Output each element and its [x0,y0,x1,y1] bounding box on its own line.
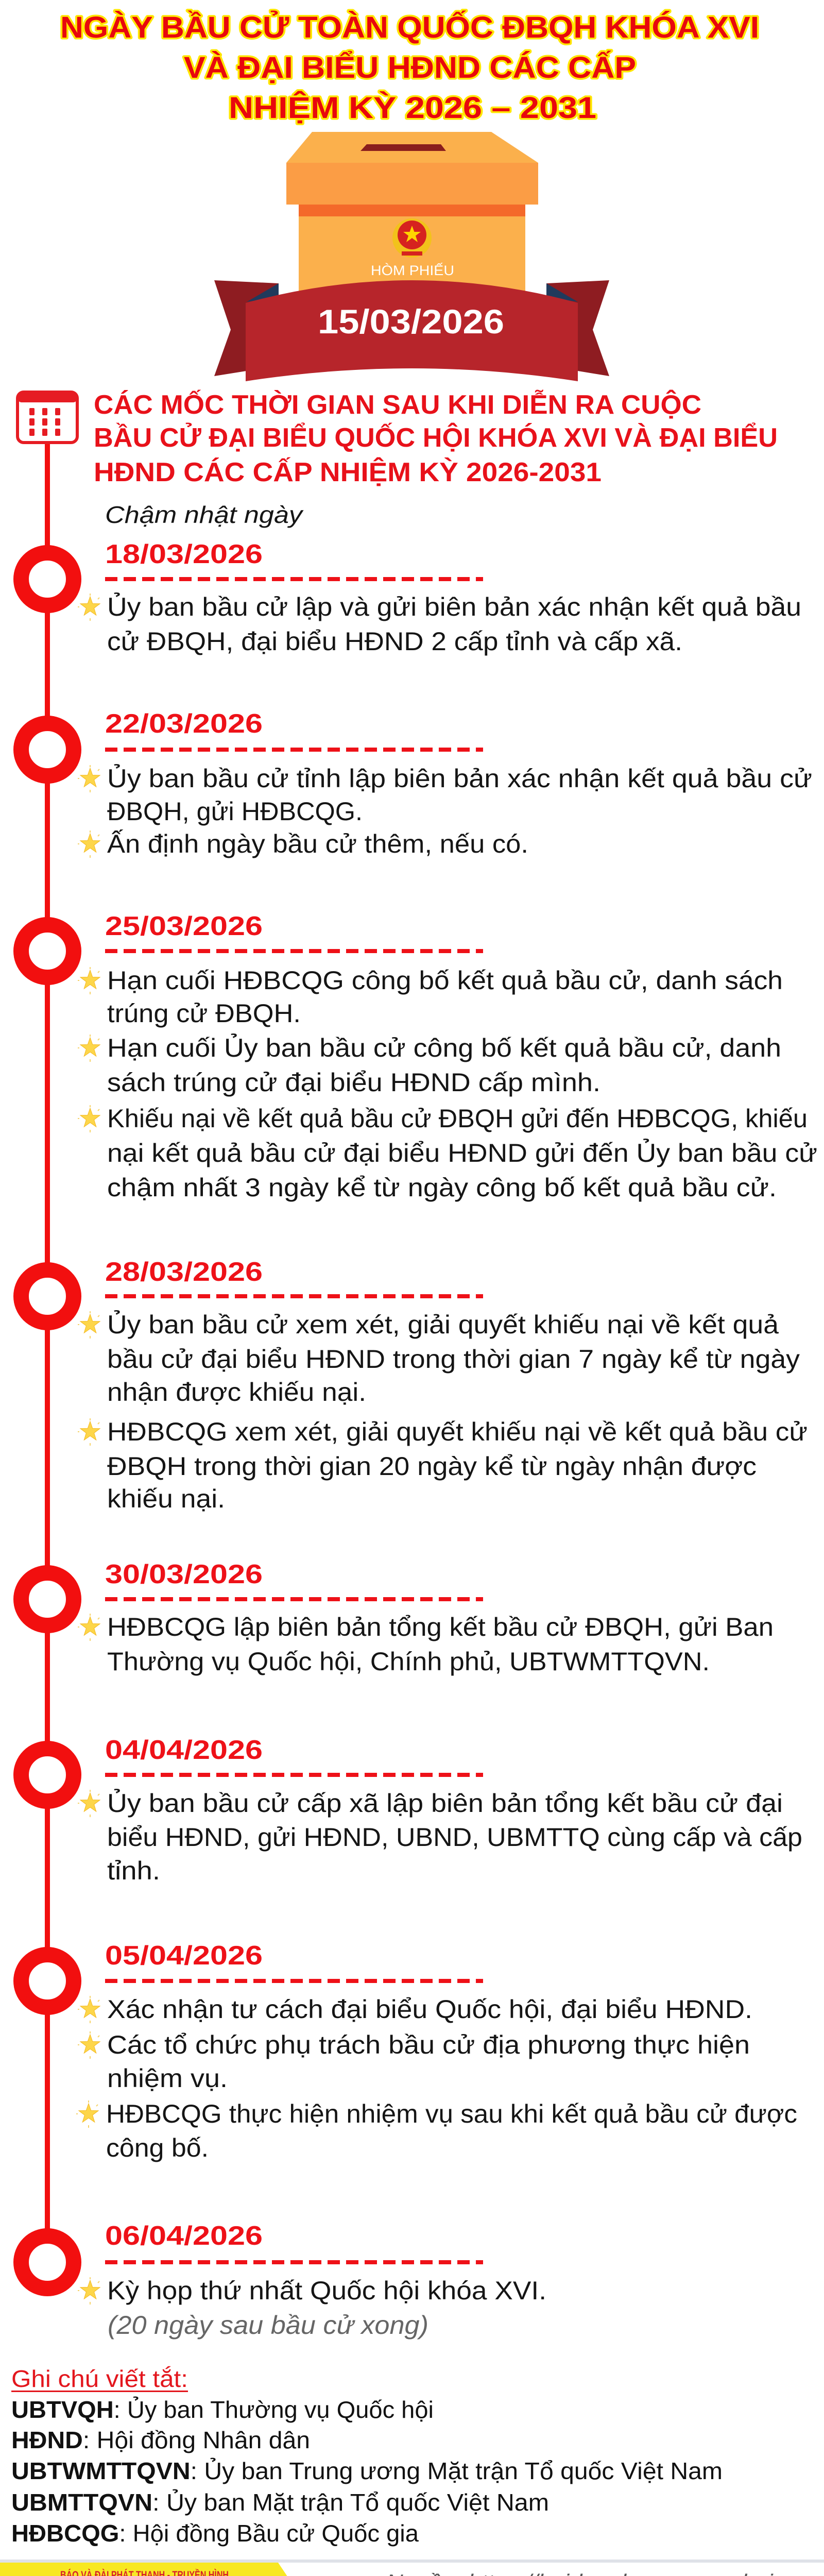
milestone: 25/03/2026: 25/03/2026 [105,911,263,941]
abbreviations legend: Ghi chú viết tắt: [11,2365,188,2392]
milestone: 05/04/2026: nhiệm vụ. [107,2064,228,2093]
milestone: 22/03/2026: ĐBQH, gửi HĐBCQG. [107,797,363,826]
milestone: 18/03/2026 [21,539,801,656]
milestone: 05/04/2026 [21,1941,797,2162]
milestone: 22/03/2026 [21,709,812,858]
milestone: 25/03/2026: chậm nhất 3 ngày kể từ ngày công bố kết quả bầu cử. [107,1173,777,1202]
ribbon with election date [214,280,609,381]
subheading: Chậm nhật ngày: Chậm nhật ngày [105,501,304,528]
footer [0,2560,824,2576]
milestone: 22/03/2026: Ấn định ngày bầu cử thêm, nếu có. [107,829,528,858]
abbreviations legend: HĐBCQG: Hội đồng Bầu cử Quốc gia [11,2520,419,2547]
milestone: 28/03/2026: nhận được khiếu nại. [107,1378,366,1406]
title [60,11,759,125]
milestone: 30/03/2026: 30/03/2026 [105,1560,263,1589]
milestone: 04/04/2026: biểu HĐND, gửi HĐND, UBND, UBMTTQ cùng cấp và cấp [107,1823,802,1852]
timeline vertical line [45,440,50,2264]
milestone: 25/03/2026: Khiếu nại về kết quả bầu cử ĐBQH gửi đến HĐBCQG, khiếu [107,1104,808,1133]
abbreviations legend [11,2365,723,2547]
milestone: 18/03/2026: 18/03/2026 [105,539,263,569]
milestone: 18/03/2026: cử ĐBQH, đại biểu HĐND 2 cấp tỉnh và cấp xã. [107,627,682,656]
milestone: 28/03/2026: ĐBQH trong thời gian 20 ngày kể từ ngày nhận được [107,1452,757,1481]
milestone: 30/03/2026 [21,1560,774,1676]
milestone: 30/03/2026: HĐBCQG lập biên bản tổng kết bầu cử ĐBQH, gửi Ban [107,1613,774,1641]
milestone: 25/03/2026: Hạn cuối HĐBCQG công bố kết quả bầu cử, danh sách [107,966,783,995]
label: HÒM PHIẾU: HÒM PHIẾU [371,262,454,278]
milestone: 04/04/2026 [21,1735,802,1885]
milestone: 05/04/2026: 05/04/2026 [105,1941,263,1971]
section heading: CÁC MỐC THỜI GIAN SAU KHI DIỄN RA CUỘC [94,389,701,420]
milestone: 25/03/2026: trúng cử ĐBQH. [107,999,301,1028]
milestone: 28/03/2026: 28/03/2026 [105,1257,263,1287]
ribbon with election date: 15/03/2026 [318,302,504,341]
milestone: 28/03/2026 [21,1257,808,1513]
milestone: 05/04/2026: Các tổ chức phụ trách bầu cử địa phương thực hiện [107,2030,750,2059]
title: VÀ ĐẠI BIỂU HĐND CÁC CẤP [184,51,636,84]
milestone: 04/04/2026: 04/04/2026 [105,1735,263,1765]
section heading [94,389,778,487]
title: NHIỆM KỲ 2026 – 2031 [229,91,596,125]
milestone: 25/03/2026: nại kết quả bầu cử đại biểu HĐND gửi đến Ủy ban bầu cử [107,1138,817,1167]
abbreviations legend: HĐND: Hội đồng Nhân dân [11,2427,310,2453]
abbreviations legend: UBMTTQVN : Ủy ban Mặt trận Tổ quốc Việt Nam [11,2489,549,2516]
milestone: 25/03/2026 [21,911,817,1202]
icon: calendar [18,392,77,443]
milestone: 06/04/2026 [21,2221,546,2340]
milestone: 06/04/2026: 06/04/2026 [105,2221,263,2251]
abbreviations legend: UBTWMTTQVN : Ủy ban Trung ương Mặt trận Tổ quốc Việt Nam [11,2458,723,2484]
milestone: 25/03/2026: Hạn cuối Ủy ban bầu cử công bố kết quả bầu cử, danh [107,1033,781,1062]
milestone: 28/03/2026: HĐBCQG xem xét, giải quyết khiếu nại về kết quả bầu cử [107,1417,808,1446]
milestone: 05/04/2026: công bố. [106,2133,209,2162]
icon: national emblem [392,218,432,258]
milestone: 28/03/2026: Ủy ban bầu cử xem xét, giải quyết khiếu nại về kết quả [107,1310,779,1339]
milestone: 22/03/2026: Ủy ban bầu cử tỉnh lập biên bản xác nhận kết quả bầu cử [107,764,812,793]
milestone: 05/04/2026: Xác nhận tư cách đại biểu Quốc hội, đại biểu HĐND. [107,1995,752,2024]
milestone: 04/04/2026: tỉnh. [107,1856,160,1885]
milestone: 06/04/2026: (20 ngày sau bầu cử xong) [108,2311,428,2340]
milestone: 22/03/2026: 22/03/2026 [105,709,263,739]
milestone: 04/04/2026: Ủy ban bầu cử cấp xã lập biên bản tổng kết bầu cử đại [107,1788,783,1818]
section heading: HĐND CÁC CẤP NHIỆM KỲ 2026-2031 [94,457,602,487]
milestone: 05/04/2026: HĐBCQG thực hiện nhiệm vụ sau khi kết quả bầu cử được [106,2099,797,2128]
milestone: 06/04/2026: Kỳ họp thứ nhất Quốc hội khóa XVI. [107,2276,546,2305]
title: NGÀY BẦU CỬ TOÀN QUỐC ĐBQH KHÓA XVI [60,11,759,44]
milestone: 25/03/2026: sách trúng cử đại biểu HĐND cấp mình. [107,1068,600,1097]
abbreviations legend: UBTVQH: Ủy ban Thường vụ Quốc hội [11,2396,434,2423]
milestone: 30/03/2026: Thường vụ Quốc hội, Chính phủ, UBTWMTTQVN. [107,1647,710,1676]
milestone: 18/03/2026: Ủy ban bầu cử lập và gửi biên bản xác nhận kết quả bầu [107,592,801,621]
ballot box [286,132,538,294]
section heading: BẦU CỬ ĐẠI BIỂU QUỐC HỘI KHÓA XVI VÀ ĐẠI BIỂU [94,422,778,453]
milestone: 28/03/2026: khiếu nại. [107,1484,225,1513]
milestone: 28/03/2026: bầu cử đại biểu HĐND trong thời gian 7 ngày kể từ ngày [107,1345,800,1374]
